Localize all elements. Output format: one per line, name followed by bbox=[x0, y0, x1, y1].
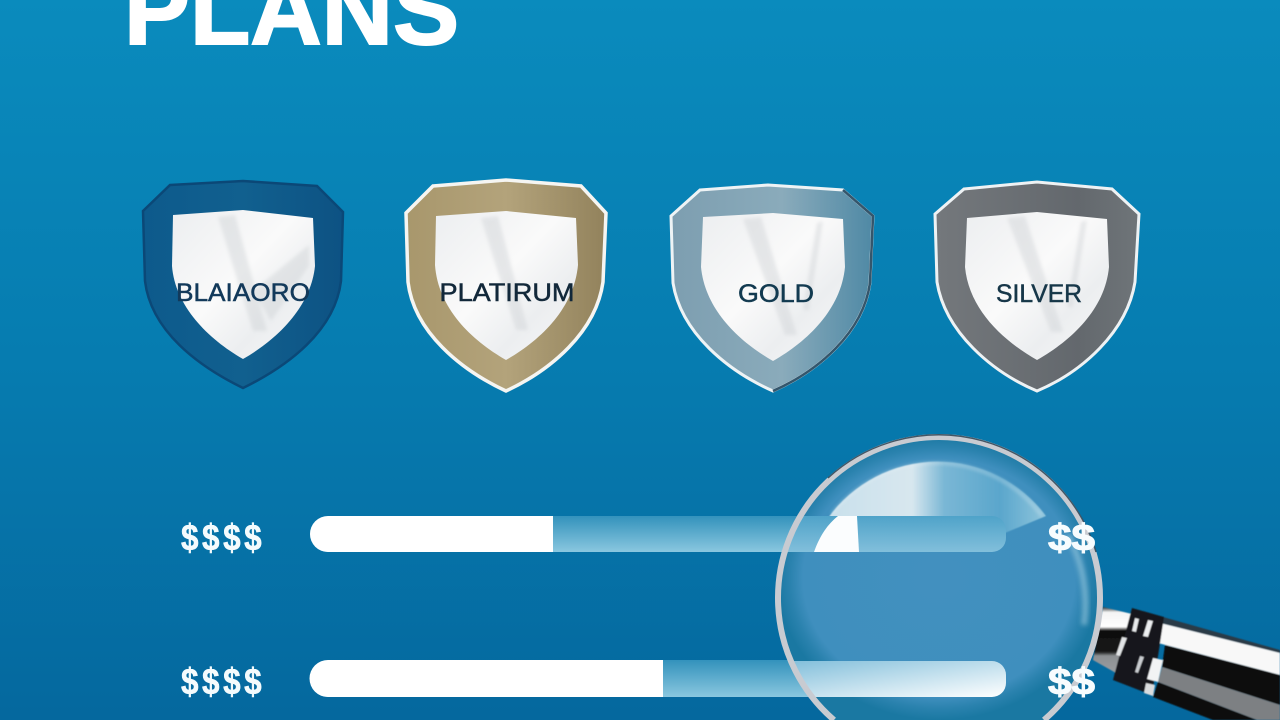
right price label: row one: $$ bbox=[1048, 517, 1095, 558]
lens contents bbox=[770, 462, 1085, 697]
shield face bbox=[435, 211, 578, 360]
handle shaft bbox=[1153, 617, 1280, 720]
shield face bbox=[965, 212, 1109, 360]
handle collar bbox=[1113, 608, 1164, 696]
glare edge bbox=[832, 463, 1042, 516]
price bar: row two bbox=[310, 660, 1006, 697]
left price label: row one: $$$$ bbox=[181, 518, 265, 559]
handle neck bbox=[1093, 607, 1132, 673]
magnified bar one bbox=[770, 516, 1006, 552]
magnifying glass handle bbox=[1093, 607, 1280, 720]
shield frame bbox=[143, 181, 343, 388]
panel: shield two bbox=[406, 180, 606, 391]
panel: shield four bbox=[935, 182, 1139, 391]
lens glare bbox=[815, 462, 1046, 535]
magnified bar two bbox=[794, 661, 1006, 697]
shield dark edge bbox=[773, 190, 873, 391]
right price label: row two: $$ bbox=[1048, 661, 1095, 702]
shield label: BLAIAORO bbox=[176, 279, 310, 307]
shield frame bbox=[406, 180, 606, 391]
price bar: row one bbox=[310, 516, 1006, 552]
paper creases bbox=[743, 217, 823, 335]
bar white fill bbox=[310, 516, 553, 552]
panel: shield one bbox=[143, 181, 343, 388]
magnified white segment bbox=[814, 516, 859, 552]
bar track bbox=[310, 660, 1006, 697]
paper creases bbox=[218, 215, 309, 331]
shield face bbox=[172, 210, 315, 359]
shield label: GOLD bbox=[738, 280, 814, 308]
shield frame bbox=[671, 185, 873, 391]
shield label: PLATIRUM bbox=[440, 279, 574, 307]
shield frame bbox=[935, 182, 1139, 391]
lens rim bbox=[778, 437, 1100, 720]
magnifying glass lens bbox=[770, 435, 1101, 720]
panel: shield three bbox=[671, 185, 873, 391]
lens outline bbox=[828, 435, 1096, 552]
lens glass bbox=[777, 435, 1101, 720]
bar track bbox=[310, 516, 1006, 552]
shield label: SILVER bbox=[996, 280, 1082, 308]
left price label: row two: $$$$ bbox=[181, 662, 265, 703]
bar white fill bbox=[310, 660, 663, 697]
paper creases bbox=[481, 216, 528, 330]
shield face bbox=[701, 213, 845, 361]
lens crescent bbox=[1068, 535, 1085, 625]
paper creases bbox=[1007, 216, 1087, 332]
